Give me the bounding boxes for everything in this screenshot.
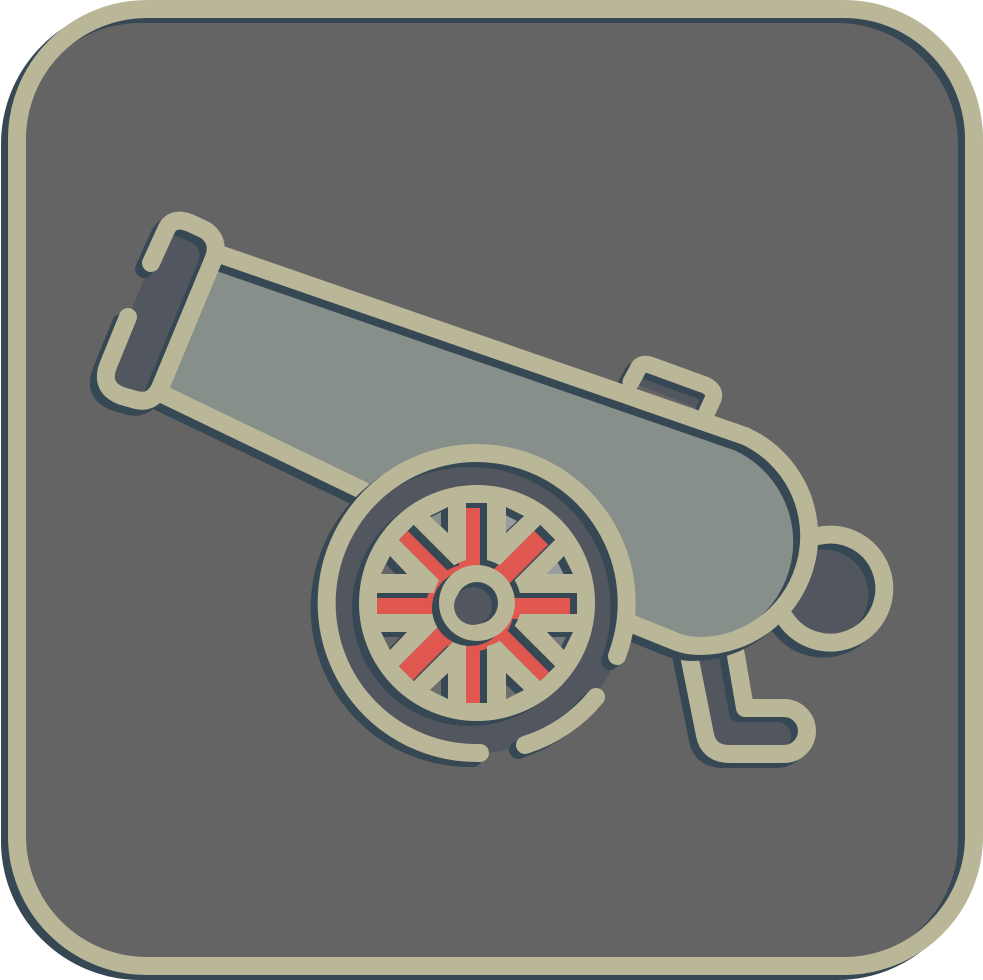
icon: cannonball [776,535,884,649]
icon: wheel [320,453,627,758]
wheel hub [432,565,515,646]
wheel disc [352,485,595,726]
icon: barrel handle [625,364,714,417]
wheel tyre and rim [320,453,627,758]
icon: carriage leg [681,650,807,759]
icon: cannon barrel [99,221,809,652]
wheel gaps between spokes [381,507,573,699]
red spokes [377,503,577,703]
